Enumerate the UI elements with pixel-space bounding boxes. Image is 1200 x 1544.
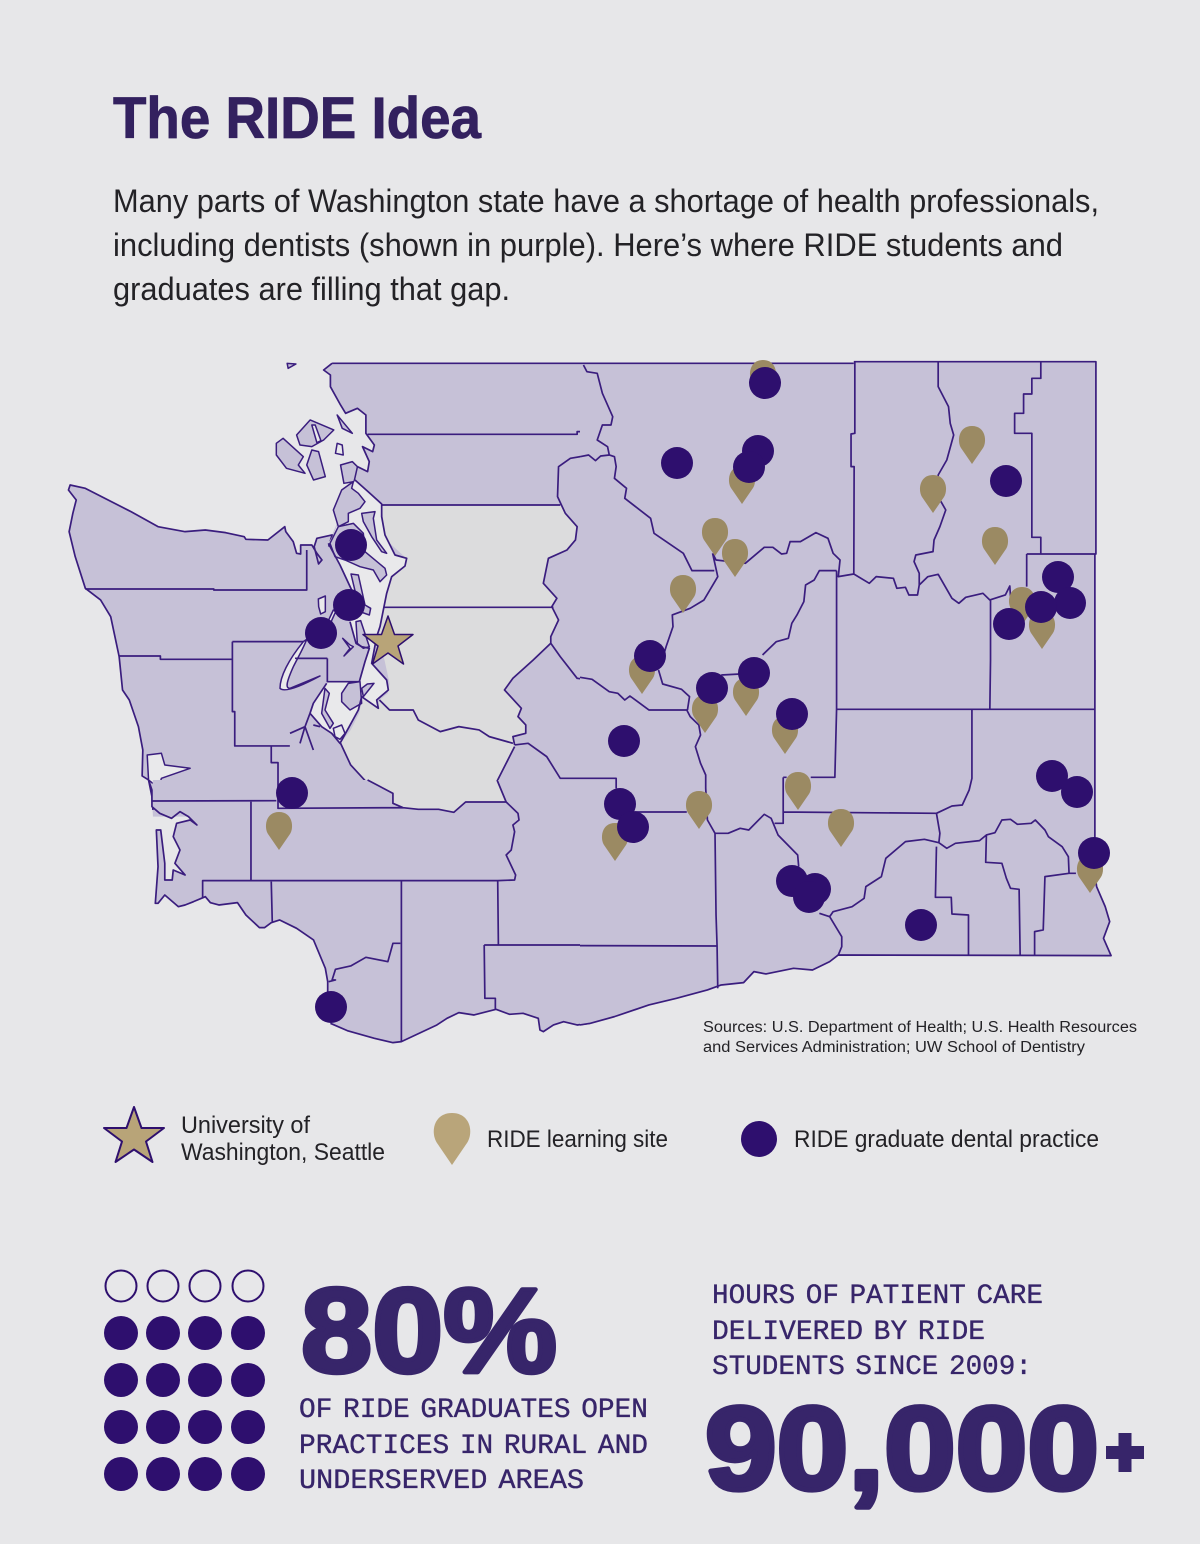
intro text: Many parts of Washington state have a shortage of health professionals, [113, 183, 1099, 219]
title: The RIDE Idea [113, 86, 482, 151]
sources [703, 1019, 1137, 1056]
sources: Sources: U.S. Department of Health; U.S. Health Resources [703, 1019, 1137, 1036]
stat caption: hours: STUDENTS SINCE 2009: [712, 1352, 1032, 1383]
legend: circle icon [741, 1121, 777, 1157]
stat caption: graduates: PRACTICES IN RURAL AND [299, 1431, 648, 1462]
intro text: graduates are filling that gap. [113, 271, 510, 307]
dot matrix: 80 percent [104, 1270, 265, 1491]
stat caption: hours: DELIVERED BY RIDE [712, 1317, 985, 1348]
legend [104, 1107, 1099, 1166]
legend: University of Washington label: University of [181, 1112, 310, 1139]
legend: University of Washington label: Washington, Seattle [181, 1139, 385, 1166]
legend: graduate practice label: RIDE graduate dental practice [794, 1126, 1099, 1153]
stat: 80%: 80% [301, 1264, 557, 1398]
stat: 90,000+: 90,000 [705, 1383, 1099, 1515]
map: Washington state counties [68, 362, 1111, 1043]
legend: pin icon [434, 1113, 470, 1165]
legend: University of Washington label [181, 1112, 385, 1166]
stat caption: hours [712, 1281, 1043, 1383]
map markers: RIDE graduate dental practices [276, 367, 1110, 1023]
stat caption: graduates [299, 1395, 648, 1497]
stat caption: graduates: UNDERSERVED AREAS [299, 1466, 584, 1497]
stat caption: graduates: OF RIDE GRADUATES OPEN [299, 1395, 648, 1426]
sources: and Services Administration; UW School of Dentistry [703, 1039, 1085, 1056]
map markers: RIDE learning sites [266, 360, 1103, 893]
intro text [113, 183, 1099, 307]
intro text: including dentists (shown in purple). Here’s where RIDE students and [113, 227, 1063, 263]
stat caption: hours: HOURS OF PATIENT CARE [712, 1281, 1043, 1312]
map marker: University of Washington star [363, 616, 413, 664]
legend: learning site label: RIDE learning site [487, 1126, 668, 1153]
legend: star icon [104, 1107, 164, 1162]
stat: plus sign [1106, 1433, 1144, 1472]
